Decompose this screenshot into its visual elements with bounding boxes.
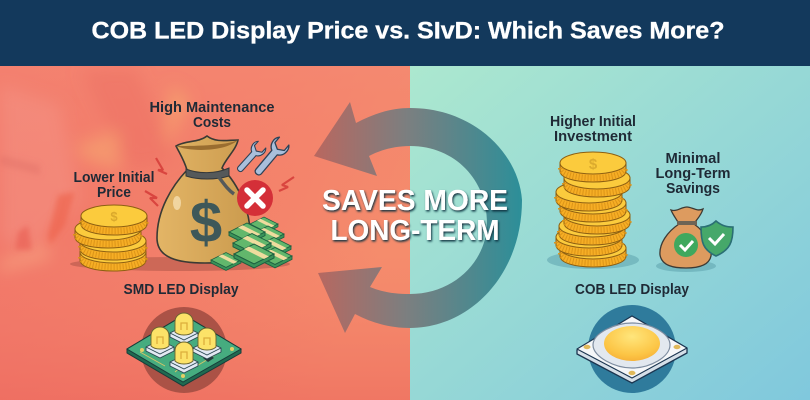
label: higher initial investment: Investment bbox=[554, 129, 632, 145]
icon: money bag: $ bbox=[190, 190, 222, 255]
circular arrow bbox=[314, 102, 522, 333]
label: SMD LED display: SMD LED Display bbox=[124, 281, 239, 298]
label: minimal long-term savings: Minimal bbox=[666, 151, 720, 167]
header bar bbox=[0, 0, 810, 66]
icon: money bag bbox=[157, 136, 250, 263]
icon: wrenches bbox=[233, 136, 291, 180]
label: minimal long-term savings: Savings bbox=[666, 181, 720, 197]
icon: SMD LED module bbox=[127, 307, 241, 393]
center message bbox=[322, 185, 508, 247]
label: high maintenance costs: High Maintenance bbox=[150, 100, 274, 116]
label: higher initial investment: Higher Initial bbox=[550, 114, 636, 130]
title: COB LED Display Price vs. SIvD: Which Saves More? bbox=[92, 18, 724, 44]
label: minimal long-term savings bbox=[656, 151, 730, 197]
icon: COB LED chip bbox=[577, 305, 687, 393]
icon: cash pile bbox=[211, 217, 292, 270]
icon: red x badge bbox=[237, 180, 273, 216]
label: high maintenance costs bbox=[150, 100, 274, 131]
label: high maintenance costs: Costs bbox=[193, 115, 231, 131]
center message: SAVES MORE bbox=[322, 185, 508, 217]
label: minimal long-term savings: Long-Term bbox=[656, 166, 730, 182]
icon: tall coin stack bbox=[547, 152, 639, 269]
label: lower initial price bbox=[74, 170, 154, 201]
panel: SMD background bbox=[0, 66, 410, 400]
icon: small coin stack: $ bbox=[110, 209, 118, 224]
icon: ground shadow bbox=[70, 257, 290, 271]
icon: savings bag and shield bbox=[656, 207, 733, 272]
label: higher initial investment bbox=[550, 114, 636, 145]
icon: warning sparks bbox=[145, 158, 294, 206]
label: lower initial price: Lower Initial bbox=[74, 170, 154, 186]
icon: tall coin stack: $ bbox=[589, 156, 598, 173]
label: lower initial price: Price bbox=[97, 185, 131, 201]
icon: small coin stack bbox=[75, 205, 147, 271]
panel: COB background bbox=[410, 66, 810, 400]
center message: LONG-TERM bbox=[330, 215, 500, 247]
label: COB LED display: COB LED Display bbox=[575, 281, 690, 298]
